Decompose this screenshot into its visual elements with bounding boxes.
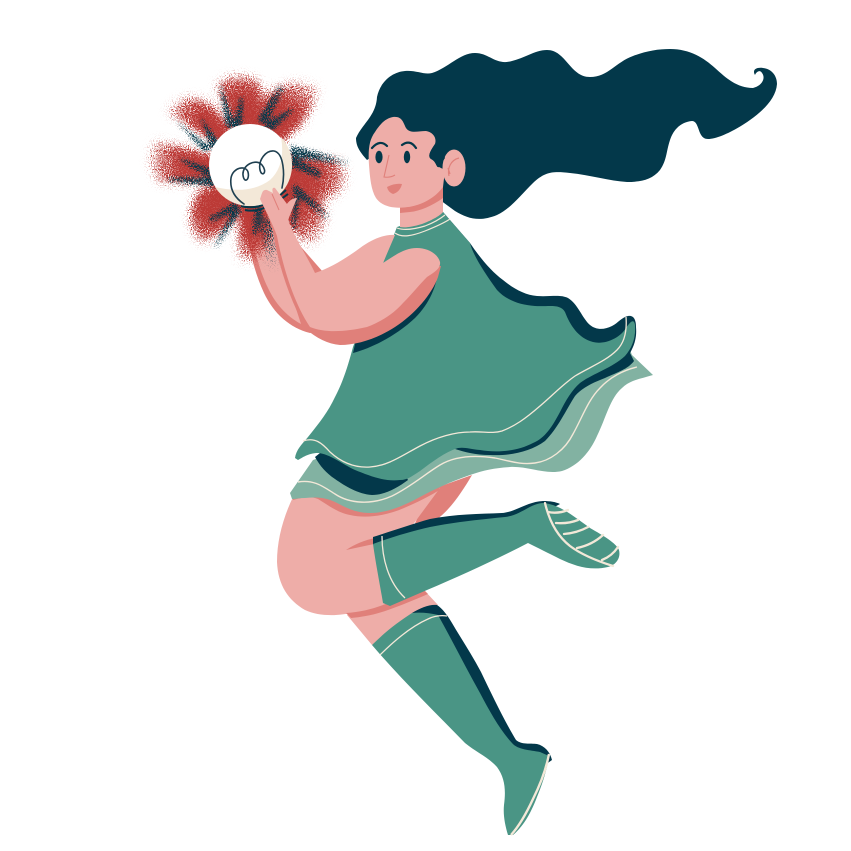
lower layer stitch line (298, 367, 637, 502)
arm shadow on dress (353, 270, 438, 353)
dress (295, 212, 636, 495)
raised boot (373, 501, 619, 606)
bulb glass (209, 124, 291, 206)
planted boot (372, 605, 552, 835)
eyebrows (372, 143, 416, 148)
hair wisp over face (429, 144, 445, 167)
arm shadow tone (265, 205, 441, 345)
bulb base (241, 190, 288, 211)
dress hem line (303, 317, 626, 467)
mouth (387, 184, 402, 194)
ear (442, 150, 466, 186)
sole ribs (545, 503, 618, 566)
face (369, 117, 445, 208)
thigh (277, 470, 472, 615)
dress light lower layer (290, 350, 653, 513)
lower leg skin (346, 590, 438, 645)
bulb shade (215, 137, 292, 206)
head (369, 117, 466, 208)
boot top line (382, 536, 405, 598)
neck (400, 180, 443, 227)
boot top line (380, 616, 447, 655)
thigh crease (346, 538, 375, 550)
back arm (243, 210, 320, 333)
eyes (375, 151, 383, 163)
dress body (295, 212, 635, 480)
thigh shadow under skirt (293, 470, 441, 517)
light bulb glow: dark rays (166, 84, 350, 272)
light bulb glow: red grain (149, 75, 347, 262)
nose (384, 155, 395, 177)
front arm and hand (260, 188, 441, 353)
dress shadow left (315, 445, 408, 495)
boot sole line (511, 754, 549, 835)
light bulb (209, 124, 292, 211)
dress shadow (400, 212, 636, 455)
arm (260, 188, 440, 331)
collar lines (395, 215, 450, 236)
hair (356, 49, 777, 219)
finger crease (272, 194, 279, 210)
filament (231, 151, 283, 204)
